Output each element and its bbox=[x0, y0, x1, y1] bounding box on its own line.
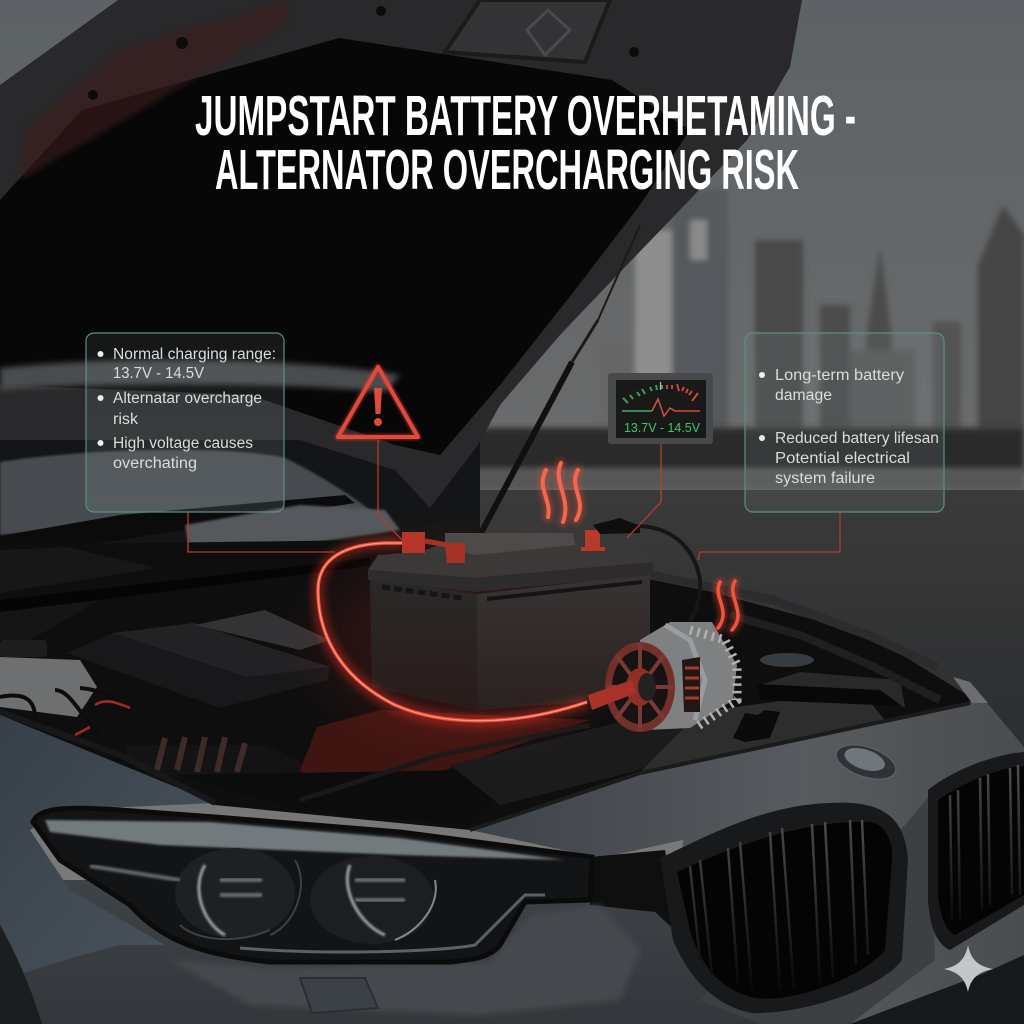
meter reading: 13.7V - 14.5V bbox=[624, 420, 700, 435]
engine bay bbox=[0, 540, 988, 830]
alternator output terminal bbox=[588, 680, 636, 710]
black cable bbox=[610, 526, 700, 622]
car front body bbox=[0, 703, 1024, 1024]
warning triangle icon bbox=[338, 367, 418, 437]
meter scale red bbox=[660, 382, 662, 390]
headlight to grille connector bbox=[590, 850, 680, 935]
lower bumper highlight bbox=[170, 905, 640, 1015]
hood front panel bbox=[470, 703, 1024, 1024]
connector lines bbox=[188, 440, 840, 560]
panel: left notes: Alternatar overcharge bbox=[113, 390, 262, 407]
panel: right notes: damage bbox=[775, 387, 832, 404]
badge emblem bbox=[832, 738, 900, 786]
hood edge bar bbox=[650, 575, 937, 667]
coolant reservoir bbox=[0, 657, 97, 717]
panel: right notes: Reduced battery lifesan bbox=[775, 430, 939, 447]
meter scale green bbox=[623, 385, 662, 403]
windshield and cowl behind the engine bbox=[0, 380, 480, 570]
kidney grille left bbox=[660, 803, 908, 1013]
left fender bbox=[0, 715, 215, 980]
panel: left notes: risk bbox=[113, 411, 138, 428]
battery terminal: positive bbox=[581, 530, 605, 551]
engine cover bbox=[67, 623, 330, 708]
panel: right notes: system failure bbox=[775, 470, 875, 487]
hood strut bbox=[480, 225, 640, 535]
panel between grilles bbox=[700, 795, 935, 1024]
panel: right notes bbox=[745, 333, 944, 512]
open hood underside bbox=[0, 0, 802, 508]
panel: left notes: 13.7V - 14.5V bbox=[113, 365, 205, 382]
meter pulse line bbox=[652, 399, 675, 416]
right engine compartment bbox=[640, 690, 885, 772]
panel: left notes bbox=[86, 333, 284, 512]
panel: left notes: High voltage causes bbox=[113, 435, 253, 452]
corrugated intake hose bbox=[125, 745, 300, 778]
panel: left notes: Normal charging range: bbox=[113, 346, 276, 363]
sparkle watermark bbox=[944, 945, 993, 992]
washer cap bbox=[300, 978, 378, 1013]
battery bbox=[368, 530, 653, 710]
panel: left notes: overchating bbox=[113, 455, 197, 472]
battery terminal: negative bbox=[445, 543, 465, 563]
headlight bbox=[33, 808, 592, 962]
battery clamp bbox=[402, 532, 425, 553]
heat waves above battery bbox=[543, 463, 580, 522]
panel: right notes: Potential electrical bbox=[775, 450, 910, 467]
panel: right notes: Long-term battery bbox=[775, 367, 904, 384]
title bbox=[195, 84, 856, 202]
kidney grille right bbox=[928, 752, 1024, 950]
voltage meter icon bbox=[608, 373, 713, 444]
bumper bbox=[0, 880, 760, 1024]
red lit intake area bbox=[300, 710, 590, 800]
red glow around battery bbox=[280, 515, 660, 765]
red glowing cable bbox=[318, 541, 587, 721]
lower right dark trim bbox=[850, 955, 1024, 1024]
alternator bbox=[588, 622, 737, 732]
heat waves beside alternator bbox=[718, 581, 738, 630]
